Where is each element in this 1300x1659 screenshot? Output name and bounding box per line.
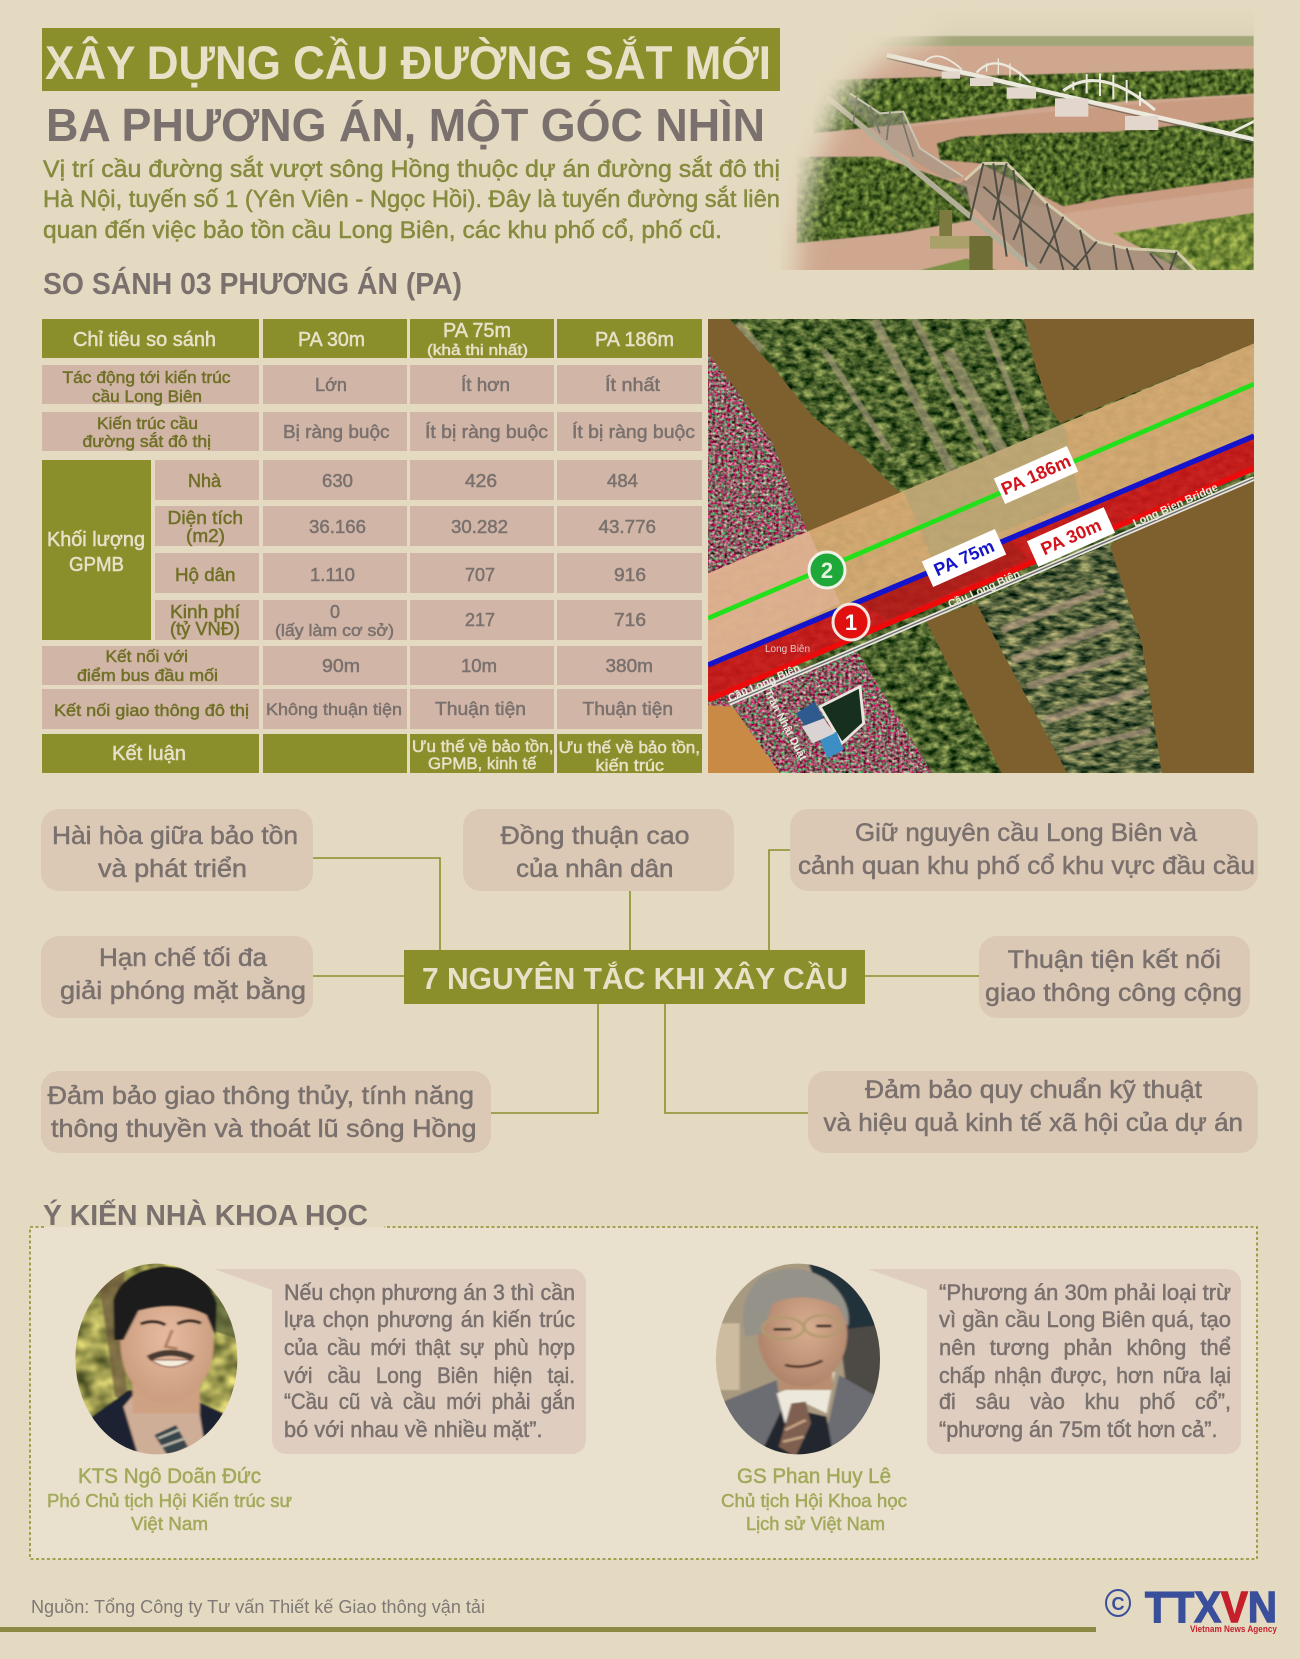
map road names: Cầu Long Biên (726, 662, 802, 705)
row: cost: (tỷ VNĐ) (170, 619, 240, 639)
row: cost (155, 600, 702, 640)
label: PA 30m: PA 30m (1038, 515, 1104, 559)
row: bus hub connection: Kết nối với (106, 647, 188, 666)
footer bar (0, 1627, 1096, 1632)
row: households: Hộ dân (175, 565, 236, 585)
row: area: Diện tích (168, 508, 243, 528)
quote bubble: Ngo Doan Duc: bó với nhau về nhiều mặt”. (284, 1417, 542, 1442)
table header row (42, 319, 702, 359)
subtitle: BA PHƯƠNG ÁN, MỘT GÓC NHÌN (46, 99, 765, 151)
quote bubble: Phan Huy Le: chấp nhận được, hơn nữa lại (939, 1363, 1231, 1388)
row: bus hub connection (42, 646, 702, 685)
row: urban traffic connection: Kết nối giao thông đô thị (54, 701, 249, 720)
row: conclusion: kiến trúc (596, 756, 665, 775)
white arch bridge (887, 55, 1260, 144)
expert name: Phan Huy Le (721, 1465, 907, 1534)
quote bubble: Phan Huy Le: đi sâu vào khu phố cổ”, (939, 1389, 1231, 1414)
row: area: (m2) (186, 526, 225, 546)
row: conclusion: Ưu thế về bảo tồn, (412, 737, 554, 756)
quote bubble: Phan Huy Le: “Phương án 30m phải loại trừ (939, 1280, 1231, 1305)
row: houses: 484 (607, 471, 638, 491)
row: railway bridge architecture: Kiến trúc cầu (97, 414, 198, 433)
row: urban traffic connection: Thuận tiện (435, 699, 526, 719)
map road names (726, 481, 1220, 763)
row: urban traffic connection (42, 689, 702, 729)
principle: public consensus: của nhân dân (516, 855, 674, 883)
row: railway bridge architecture: Bị ràng buộc (283, 422, 390, 442)
title banner: XÂY DỰNG CẦU ĐƯỜNG SẮT MỚI (45, 36, 771, 89)
principle: technical standards and efficiency: và hiệu quả kinh tế xã hội của dự án (824, 1109, 1243, 1137)
row: railway bridge architecture: Ít bị ràng buộc (572, 422, 695, 442)
portrait: Ngo Doan Duc (75, 1264, 238, 1454)
principles centre box: 7 NGUYÊN TẮC KHI XÂY CẦU (422, 960, 848, 996)
bridge illustration photo (780, 28, 1254, 270)
quote bubble: Phan Huy Le: nên tương phản không thể (939, 1335, 1231, 1360)
principle: technical standards and efficiency: Đảm bảo quy chuẩn kỹ thuật (865, 1076, 1202, 1104)
red line (708, 468, 1254, 700)
quote bubble: Ngo Doan Duc: với cầu Long Biên hiện tại. (284, 1363, 575, 1388)
expert name: Phan Huy Le: GS Phan Huy Lê (737, 1465, 891, 1488)
table header row: PA 186m (595, 329, 674, 351)
river (708, 319, 1254, 773)
principle: limit site clearance (41, 936, 313, 1018)
row: households: 916 (614, 565, 646, 585)
row: impact on Long Bien bridge: cầu Long Biên (92, 387, 202, 406)
principle: harmony of conservation and development: và phát triển (98, 855, 247, 883)
expert name: Ngo Doan Duc: Việt Nam (131, 1514, 208, 1534)
row: households: 707 (465, 565, 495, 585)
quote bubble: Ngo Doan Duc: “Cầu cũ và cầu mới phải gắn (284, 1389, 575, 1414)
section heading: experts: Ý KIẾN NHÀ KHOA HỌC (43, 1198, 368, 1232)
quote bubble: Phan Huy Le (868, 1269, 1241, 1454)
expert name: Phan Huy Le: Chủ tịch Hội Khoa học (721, 1491, 907, 1511)
row: houses: Nhà (188, 471, 222, 491)
row: impact on Long Bien bridge: Lớn (315, 375, 347, 395)
quote bubble: Ngo Doan Duc (214, 1269, 586, 1454)
table header row: (khả thi nhất) (427, 342, 528, 359)
row: urban traffic connection: Thuận tiện (582, 699, 673, 719)
principle: public transport connection: giao thông công cộng (985, 979, 1242, 1007)
TTXVN logo: C (1112, 1594, 1124, 1614)
map road names: Long Biên (765, 644, 810, 655)
table header row: PA 30m (298, 329, 365, 351)
row: urban traffic connection: Không thuận tiện (266, 700, 402, 719)
section heading: comparison: SO SÁNH 03 PHƯƠNG ÁN (PA) (43, 266, 462, 301)
quote bubble: Phan Huy Le: “phương án 75m tốt hơn cả”. (939, 1417, 1218, 1442)
intro paragraph: quan đến việc bảo tồn cầu Long Biên, các khu phố cổ, phố cũ. (43, 217, 722, 244)
principle: public consensus (463, 809, 734, 891)
row: impact on Long Bien bridge (42, 365, 702, 406)
marker 1: 1 (845, 610, 857, 635)
principle: limit site clearance: Hạn chế tối đa (99, 944, 267, 972)
field stripes, lower island (1002, 590, 1151, 750)
comparison table (42, 319, 702, 775)
principle: public consensus: Đồng thuận cao (500, 822, 690, 850)
row: impact on Long Bien bridge: Ít nhất (605, 375, 660, 395)
row: railway bridge architecture (42, 412, 702, 451)
quote bubble: Ngo Doan Duc: lựa chọn phương án kiến trúc (284, 1307, 575, 1332)
row: impact on Long Bien bridge: Tác động tới kiến trúc (62, 368, 231, 387)
quote bubble: Ngo Doan Duc: Nếu chọn phương án 3 thì cần (284, 1280, 575, 1305)
expert name: Ngo Doan Duc: Phó Chủ tịch Hội Kiến trúc sư (47, 1491, 292, 1511)
group label: GPMB volume: GPMB (69, 554, 124, 576)
road (729, 478, 1254, 703)
row: cost: Kinh phí (170, 602, 240, 622)
row: area: 36.166 (309, 517, 366, 537)
row: railway bridge architecture: đường sắt đô thị (82, 432, 211, 451)
label: PA 75m: PA 75m (931, 536, 997, 580)
satellite map with route options (708, 319, 1254, 773)
row: cost: 716 (614, 610, 646, 630)
principle: keep Long Bien bridge (790, 809, 1258, 891)
route band 186m (708, 343, 1254, 665)
route band 30m (708, 437, 1254, 700)
row: conclusion (42, 734, 702, 775)
row: bus hub connection: 380m (606, 656, 653, 676)
group label: GPMB volume (42, 460, 151, 640)
expert name: Ngo Doan Duc (47, 1465, 292, 1534)
principle: waterway and flood drainage (41, 1071, 491, 1153)
row: conclusion: GPMB, kinh tế (428, 754, 537, 773)
principle: public transport connection (979, 936, 1250, 1018)
table header row: PA 75m (443, 320, 511, 342)
portrait: Phan Huy Le (716, 1264, 880, 1454)
experts panel dashed border (30, 1227, 1257, 1559)
map road names: Trần Nhật Duật (761, 688, 809, 763)
row: bus hub connection: điểm bus đầu mối (77, 666, 218, 685)
intro paragraph (43, 156, 780, 244)
row: households: 1.110 (310, 565, 355, 585)
map road names: Cầu Long Biên (946, 568, 1022, 611)
label: PA 186m: PA 186m (998, 451, 1074, 499)
principle: limit site clearance: giải phóng mặt bằng (60, 976, 306, 1005)
label: PA 75m (922, 529, 1006, 587)
principle: keep Long Bien bridge: cảnh quan khu phố cổ khu vực đầu cầu (798, 852, 1255, 880)
row: houses: 630 (322, 471, 353, 491)
field stripes, upper island (736, 320, 1027, 490)
row: cost: 217 (465, 610, 495, 630)
blue line (708, 436, 1254, 665)
row: houses (155, 460, 702, 500)
row: area (155, 506, 702, 546)
principle: public transport connection: Thuận tiện kết nối (1008, 946, 1221, 974)
row: bus hub connection: 90m (322, 656, 360, 676)
row: area: 30.282 (451, 517, 508, 537)
quote bubble: Ngo Doan Duc: của cầu mới thật sự phù hợp (284, 1335, 575, 1360)
group label: GPMB volume: Khối lượng (47, 529, 145, 551)
marker 2: 2 (821, 558, 833, 583)
quote bubble: Phan Huy Le: vì gần cầu Long Biên quá, tạo (939, 1307, 1231, 1332)
label: PA 30m (1027, 507, 1115, 567)
steel Long Bien bridge (827, 93, 1197, 273)
row: conclusion: Ưu thế về bảo tồn, (559, 738, 700, 757)
row: railway bridge architecture: Ít bị ràng buộc (425, 422, 548, 442)
table header row: Chỉ tiêu so sánh (73, 329, 216, 351)
photo fade overlay (780, 28, 947, 270)
source note: Nguồn: Tổng Công ty Tư vấn Thiết kế Giao thông vận tải (31, 1597, 485, 1617)
row: houses: 426 (465, 471, 497, 491)
principles centre box (404, 950, 865, 1004)
row: area: 43.776 (598, 517, 656, 537)
principle: keep Long Bien bridge: Giữ nguyên cầu Long Biên và (855, 819, 1197, 847)
principle: waterway and flood drainage: thông thuyền và thoát lũ sông Hồng (51, 1115, 476, 1143)
expert name: Ngo Doan Duc: KTS Ngô Doãn Đức (78, 1465, 261, 1488)
principle: waterway and flood drainage: Đảm bảo giao thông thủy, tính năng (48, 1082, 474, 1110)
TTXVN logo: TTXVN (1145, 1583, 1277, 1632)
principle: harmony of conservation and development: Hài hòa giữa bảo tồn (52, 822, 298, 850)
row: bus hub connection: 10m (461, 656, 497, 676)
expert name: Phan Huy Le: Lịch sử Việt Nam (746, 1514, 885, 1534)
row: households (155, 553, 702, 593)
map road names: Long Bien Bridge (1131, 481, 1220, 530)
experts panel background (30, 1227, 1257, 1559)
green line (708, 384, 1254, 618)
row: conclusion: Kết luận (112, 743, 186, 765)
intro paragraph: Hà Nội, tuyến số 1 (Yên Viên - Ngọc Hồi). Đây là tuyến đường sắt liên (43, 186, 780, 213)
TTXVN logo: Vietnam News Agency (1190, 1624, 1277, 1634)
marker 1 (833, 604, 869, 640)
principle: harmony of conservation and development (41, 809, 313, 891)
marker 2 (809, 552, 845, 588)
row: impact on Long Bien bridge: Ít hơn (461, 375, 510, 395)
row: cost: 0 (330, 602, 340, 622)
intro paragraph: Vị trí cầu đường sắt vượt sông Hồng thuộc dự án đường sắt đô thị (43, 156, 780, 183)
row: cost: (lấy làm cơ sở) (275, 621, 394, 640)
principle: technical standards and efficiency (808, 1071, 1258, 1153)
principles connector lines (313, 850, 979, 1113)
